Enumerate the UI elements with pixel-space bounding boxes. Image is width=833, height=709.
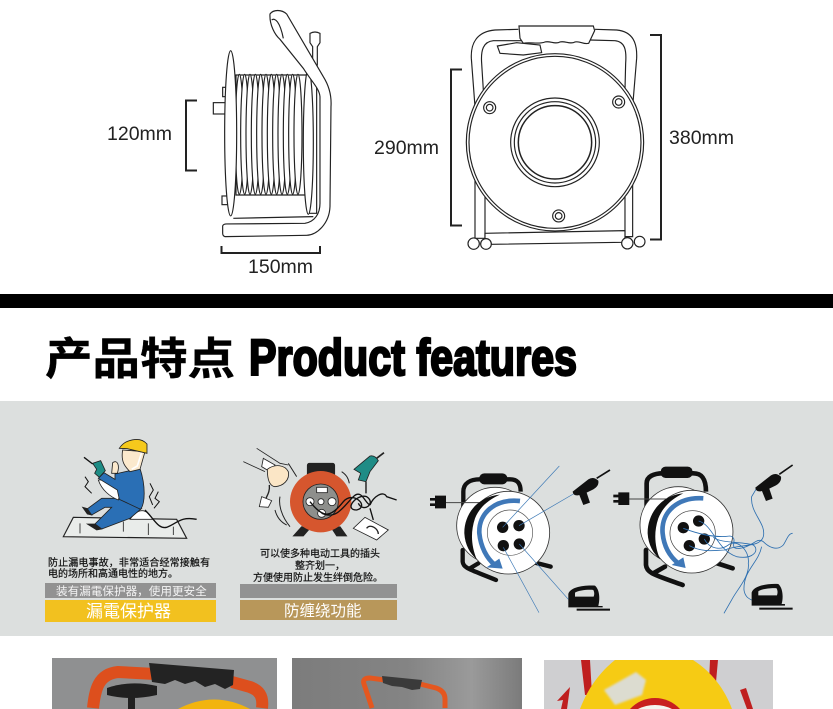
front view reel drawing — [466, 26, 645, 249]
side view reel drawing — [213, 10, 331, 237]
icon: reel with tangled cords — [613, 465, 793, 613]
dimension 120mm: 120mm — [107, 123, 172, 145]
photo: reel handle on grey background — [292, 658, 522, 709]
text: anti-tangle description: 方便使用防止发生绊倒危险。 — [253, 571, 383, 584]
text: leakage protection description: 电的场所和高通电性的地方。 — [48, 567, 178, 580]
text: anti-tangle description: 整齐划一， — [295, 559, 345, 572]
dimension 150mm — [222, 246, 320, 278]
photo: orange reel handle — [52, 658, 277, 709]
heading: 产品特点 — [45, 335, 235, 384]
dimension 290mm — [374, 70, 462, 226]
text: leakage protection description: 防止漏电事故，非常适合经常接触有 — [48, 556, 210, 569]
text: anti-tangle description — [253, 547, 383, 584]
black divider band — [0, 294, 833, 308]
label: leakage protector bars: 漏電保护器 — [86, 602, 171, 621]
icon: reel with tidy separate cords — [430, 466, 610, 613]
dimension 380mm — [650, 35, 734, 240]
photo: yellow reel with red arrows — [544, 660, 773, 709]
label: anti-tangle bars: 防缠绕功能 — [284, 602, 362, 620]
dimension 120mm — [107, 100, 197, 170]
heading — [45, 329, 577, 386]
icon: tidy reel with hand and drill — [243, 448, 397, 540]
text: leakage protection description — [48, 556, 210, 580]
label: leakage protector bars — [45, 583, 216, 622]
heading: Product features — [249, 329, 577, 386]
text: anti-tangle description: 可以使多种电动工具的插头 — [260, 547, 380, 560]
dimension 380mm: 380mm — [669, 127, 734, 149]
label: anti-tangle bars — [240, 584, 397, 620]
icon: worker receiving shock — [63, 439, 197, 538]
panel: features background — [0, 401, 833, 636]
label: leakage protector bars: 装有漏電保护器，使用更安全 — [56, 584, 207, 598]
dimension 150mm: 150mm — [248, 256, 313, 278]
dimension 290mm: 290mm — [374, 137, 439, 159]
